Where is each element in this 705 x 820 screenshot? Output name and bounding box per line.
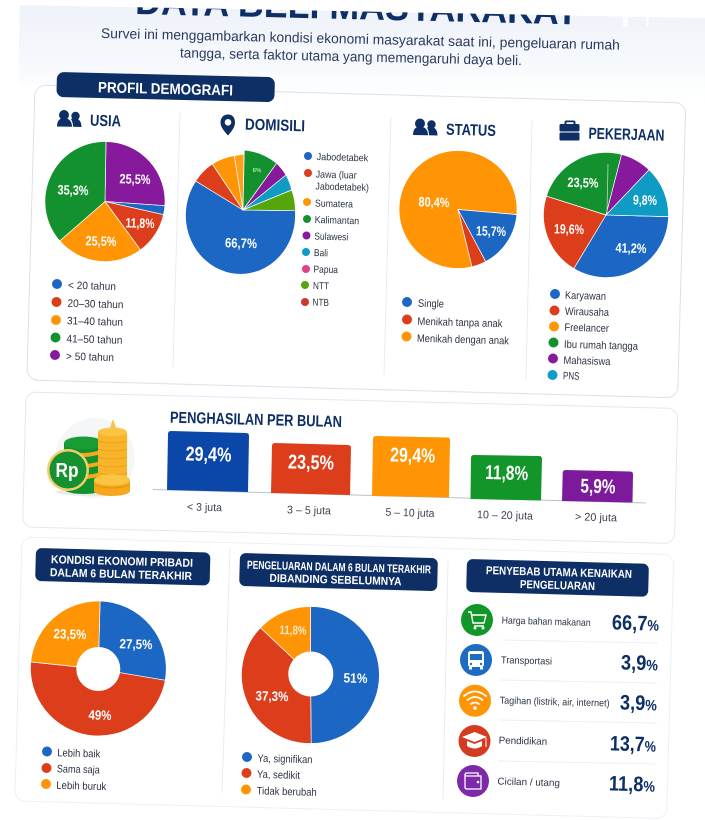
heading pill: pengeluaran 6 bulan (239, 553, 438, 591)
legend: pekerjaan: Freelancer (564, 322, 609, 335)
legend: domisili: Sumatera (315, 199, 353, 211)
legend: domisili: Jabodetabek) (315, 182, 369, 194)
heading: pekerjaan: PEKERJAAN (588, 126, 665, 145)
legend: domisili (301, 152, 369, 309)
legend: pekerjaan: Ibu rumah tangga (564, 339, 638, 353)
heading pill: penyebab kenaikan: PENGELUARAN (520, 579, 595, 593)
header background (18, 5, 705, 100)
heading pill: profil demografi (56, 72, 275, 102)
legend: domisili: NTB (312, 298, 329, 309)
donut chart: kondisi ekonomi: 49% (88, 707, 112, 723)
pie chart: pekerjaan: 9,8% (633, 192, 657, 208)
pie chart: usia (45, 141, 165, 262)
row: pendidikan (458, 725, 656, 757)
bar: 10 sampai 20 juta: 10 – 20 juta (477, 509, 534, 523)
legend: pengeluaran (241, 752, 317, 799)
subtitle: tangga, serta faktor utama yang memengaruhi daya beli. (180, 44, 522, 68)
legend: usia: > 50 tahun (66, 351, 114, 364)
heading pill: penyebab kenaikan (466, 559, 649, 597)
legend: domisili: Sulawesi (314, 232, 348, 243)
legend: usia: 31–40 tahun (67, 315, 123, 329)
legend: domisili: NTT (313, 281, 329, 292)
bar: kurang dari 3 juta (167, 431, 249, 514)
legend: domisili: Jawa (luar (316, 170, 357, 182)
bar: 5 sampai 10 juta: 5 – 10 juta (385, 507, 435, 520)
row: harga bahan makanan: Harga bahan makanan (502, 616, 591, 629)
row: tagihan (459, 685, 657, 717)
subtitle (101, 25, 620, 68)
heading pill: pengeluaran 6 bulan: PENGELUARAN DALAM 6 BULAN TERAKHIR (247, 560, 432, 576)
row: pendidikan: 13,7% (610, 732, 656, 757)
pie chart: domisili: 6% (253, 168, 262, 174)
legend: domisili: Kalimantan (315, 215, 359, 227)
heading pill: kondisi ekonomi pribadi (35, 548, 210, 586)
legend: status (402, 297, 510, 347)
panel: penghasilan per bulan (23, 392, 678, 543)
pie chart: pekerjaan: 23,5% (567, 175, 599, 191)
bar: lebih dari 20 juta: 5,9% (580, 476, 616, 498)
bar: 3 sampai 5 juta: 23,5% (288, 451, 334, 475)
pie chart: usia: 11,8% (125, 215, 155, 231)
legend: kondisi ekonomi: Sama saja (57, 763, 100, 776)
legend: usia: 20–30 tahun (67, 298, 124, 311)
legend: pekerjaan: Wirausaha (565, 306, 609, 319)
legend: pengeluaran: Tidak berubah (257, 785, 317, 799)
bar chart: penghasilan (153, 431, 646, 524)
pie chart: status (399, 150, 517, 268)
legend: kondisi ekonomi (41, 746, 107, 793)
heading: status: STATUS (446, 122, 496, 140)
pie chart: status: 80,4% (418, 194, 450, 210)
heading pill: penyebab kenaikan: PENYEBAB UTAMA KENAIKAN (486, 565, 632, 581)
icon: briefcase (560, 120, 580, 140)
legend: pekerjaan: Karyawan (565, 290, 606, 303)
icon: users usia (57, 110, 82, 127)
heading: penghasilan per bulan: PENGHASILAN PER BULAN (170, 410, 342, 431)
legend: usia: 41–50 tahun (66, 333, 123, 347)
bar: lebih dari 20 juta (562, 470, 633, 524)
legend: status: Single (418, 298, 444, 311)
legend: domisili: Jabodetabek (317, 152, 369, 164)
icon: coins and rupiah: Rp (56, 460, 78, 482)
donut chart: pengeluaran (241, 606, 379, 744)
legend: pekerjaan (548, 289, 638, 383)
donut chart: kondisi ekonomi (30, 601, 166, 736)
bar: 3 sampai 5 juta (271, 443, 351, 517)
bar: kurang dari 3 juta: 29,4% (185, 443, 232, 467)
pie chart: status: 15,7% (476, 223, 506, 239)
pie chart: pekerjaan: 41,2% (615, 240, 647, 256)
pie chart: usia: 35,3% (57, 182, 89, 198)
legend: pengeluaran: Ya, sedikit (257, 769, 300, 782)
legend: usia (50, 279, 124, 364)
bar: 5 sampai 10 juta: 29,4% (390, 444, 436, 468)
pie chart: usia: 25,5% (119, 171, 151, 187)
pie chart: domisili (185, 150, 295, 274)
legend: kondisi ekonomi: Lebih baik (57, 747, 101, 760)
row: tagihan: 3,9% (620, 691, 657, 715)
bar: 10 sampai 20 juta (470, 455, 542, 523)
legend: usia: < 20 tahun (68, 280, 116, 293)
row: cicilan (457, 765, 655, 797)
icon: coins and rupiah (47, 418, 135, 498)
heading pill: profil demografi: PROFIL DEMOGRAFI (98, 79, 233, 99)
heading pill: pengeluaran 6 bulan: DIBANDING SEBELUMNYA (269, 573, 402, 588)
heading: usia: USIA (90, 113, 122, 130)
donut chart: kondisi ekonomi: 27,5% (119, 636, 153, 652)
panel: kondisi dan pengeluaran (15, 537, 674, 819)
donut chart: pengeluaran: 37,3% (255, 688, 289, 704)
legend: status: Menikah tanpa anak (417, 316, 503, 330)
pie chart: domisili: 66,7% (225, 235, 257, 251)
row: pendidikan: Pendidikan (499, 736, 547, 748)
icon: users status (413, 118, 438, 136)
row: transportasi (460, 644, 658, 676)
bar: lebih dari 20 juta: > 20 juta (575, 511, 618, 524)
donut chart: pengeluaran: 11,8% (279, 623, 307, 638)
row: cicilan: 11,8% (609, 772, 655, 797)
pie chart: usia: 25,5% (85, 233, 117, 249)
heading pill: kondisi ekonomi pribadi: KONDISI EKONOMI PRIBADI (51, 554, 193, 570)
legend: domisili: Bali (314, 248, 328, 259)
row: harga bahan makanan (461, 604, 659, 636)
icon: location pin (220, 114, 235, 136)
row: cicilan: Cicilan / utang (497, 777, 560, 789)
pie chart: pekerjaan (543, 152, 669, 278)
row: harga bahan makanan: 66,7% (612, 611, 659, 636)
donut chart: kondisi ekonomi: 23,5% (53, 626, 87, 642)
bar: 5 sampai 10 juta (372, 436, 450, 520)
legend: kondisi ekonomi: Lebih buruk (56, 780, 107, 793)
donut chart: pengeluaran: 51% (343, 670, 368, 686)
panel: profil demografi (27, 72, 686, 398)
legend: status: Menikah dengan anak (417, 333, 510, 347)
legend: pengeluaran: Ya, signifikan (257, 753, 313, 766)
bar: 3 sampai 5 juta: 3 – 5 juta (287, 504, 332, 517)
bar: kurang dari 3 juta: < 3 juta (187, 501, 223, 514)
pie chart: pekerjaan: 19,6% (554, 221, 584, 237)
heading: domisili: DOMISILI (245, 117, 305, 135)
bar: 10 sampai 20 juta: 11,8% (485, 462, 529, 485)
heading pill: kondisi ekonomi pribadi: DALAM 6 BULAN TERAKHIR (50, 567, 193, 583)
subtitle: Survei ini menggambarkan kondisi ekonomi masyarakat saat ini, pengeluaran rumah (101, 25, 620, 53)
legend: pekerjaan: PNS (563, 370, 580, 383)
legend: pekerjaan: Mahasiswa (563, 355, 611, 368)
row: tagihan: Tagihan (listrik, air, internet) (500, 696, 610, 710)
row: transportasi: Transportasi (501, 655, 552, 668)
row: transportasi: 3,9% (621, 651, 658, 675)
legend: domisili: Papua (313, 265, 338, 276)
